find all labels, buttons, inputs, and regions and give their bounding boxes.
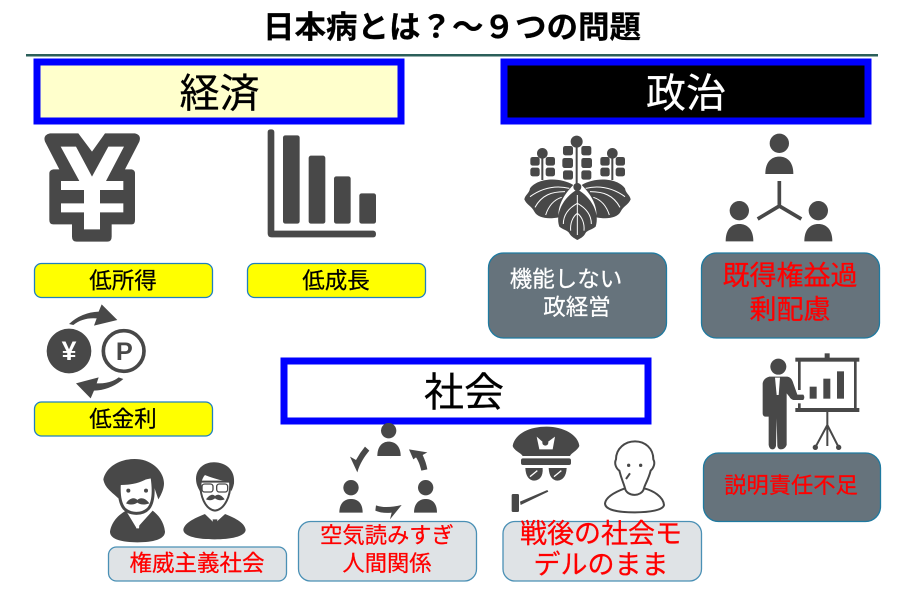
icon: yen and point exchange — [47, 304, 144, 398]
label: authoritarian society — [108, 547, 286, 581]
box: dysfunctional political management — [488, 253, 666, 338]
label: low interest rate: 低金利 — [89, 407, 157, 432]
box: excessive consideration for vested interests: 既得権益過 — [722, 261, 858, 291]
icon: yen and point exchange: ¥ — [62, 336, 77, 366]
icon: yen and point exchange: P — [116, 338, 133, 366]
label: low growth — [248, 264, 426, 298]
icon: three connected people — [726, 134, 832, 241]
label: low income: 低所得 — [89, 268, 157, 294]
heading: politics: 政治 — [646, 72, 726, 116]
heading: economy — [37, 62, 401, 121]
label: postwar social model: デルのまま — [534, 550, 668, 580]
icon: presenter with chart — [763, 353, 859, 450]
box: lack of accountability — [704, 453, 880, 522]
box: excessive consideration for vested interests — [702, 253, 880, 338]
heading: economy: 経済 — [180, 72, 260, 116]
title: 日本病とは？～９つの問題 — [263, 10, 641, 45]
icon: declining bar chart — [268, 129, 376, 237]
heading: society — [284, 361, 648, 421]
box: excessive consideration for vested interests: 剰配慮 — [750, 295, 830, 325]
icon: paulownia crest — [524, 136, 631, 240]
box: dysfunctional political management: 政経営 — [543, 295, 611, 320]
icon: circulating people — [339, 423, 437, 519]
label: authoritarian society: 権威主義社会 — [129, 551, 265, 576]
label: low income — [34, 264, 212, 298]
box: lack of accountability: 説明責任不足 — [724, 473, 858, 498]
icon: two mustached men — [103, 459, 246, 542]
heading: politics — [504, 62, 868, 121]
label: excessive air-reading relationships: 人間関係 — [342, 551, 432, 576]
label: low growth: 低成長 — [302, 268, 370, 294]
label: excessive air-reading relationships — [298, 522, 476, 581]
heading: society: 社会 — [424, 371, 504, 415]
label: postwar social model — [503, 519, 702, 581]
label: postwar social model: 戦後の社会モ — [520, 519, 682, 549]
label: excessive air-reading relationships: 空気読みすぎ — [320, 523, 454, 548]
label: low interest rate — [34, 402, 212, 436]
icon: occupation officer and bald man — [512, 427, 664, 512]
icon: yen — [44, 133, 140, 242]
box: dysfunctional political management: 機能しない — [510, 267, 622, 292]
